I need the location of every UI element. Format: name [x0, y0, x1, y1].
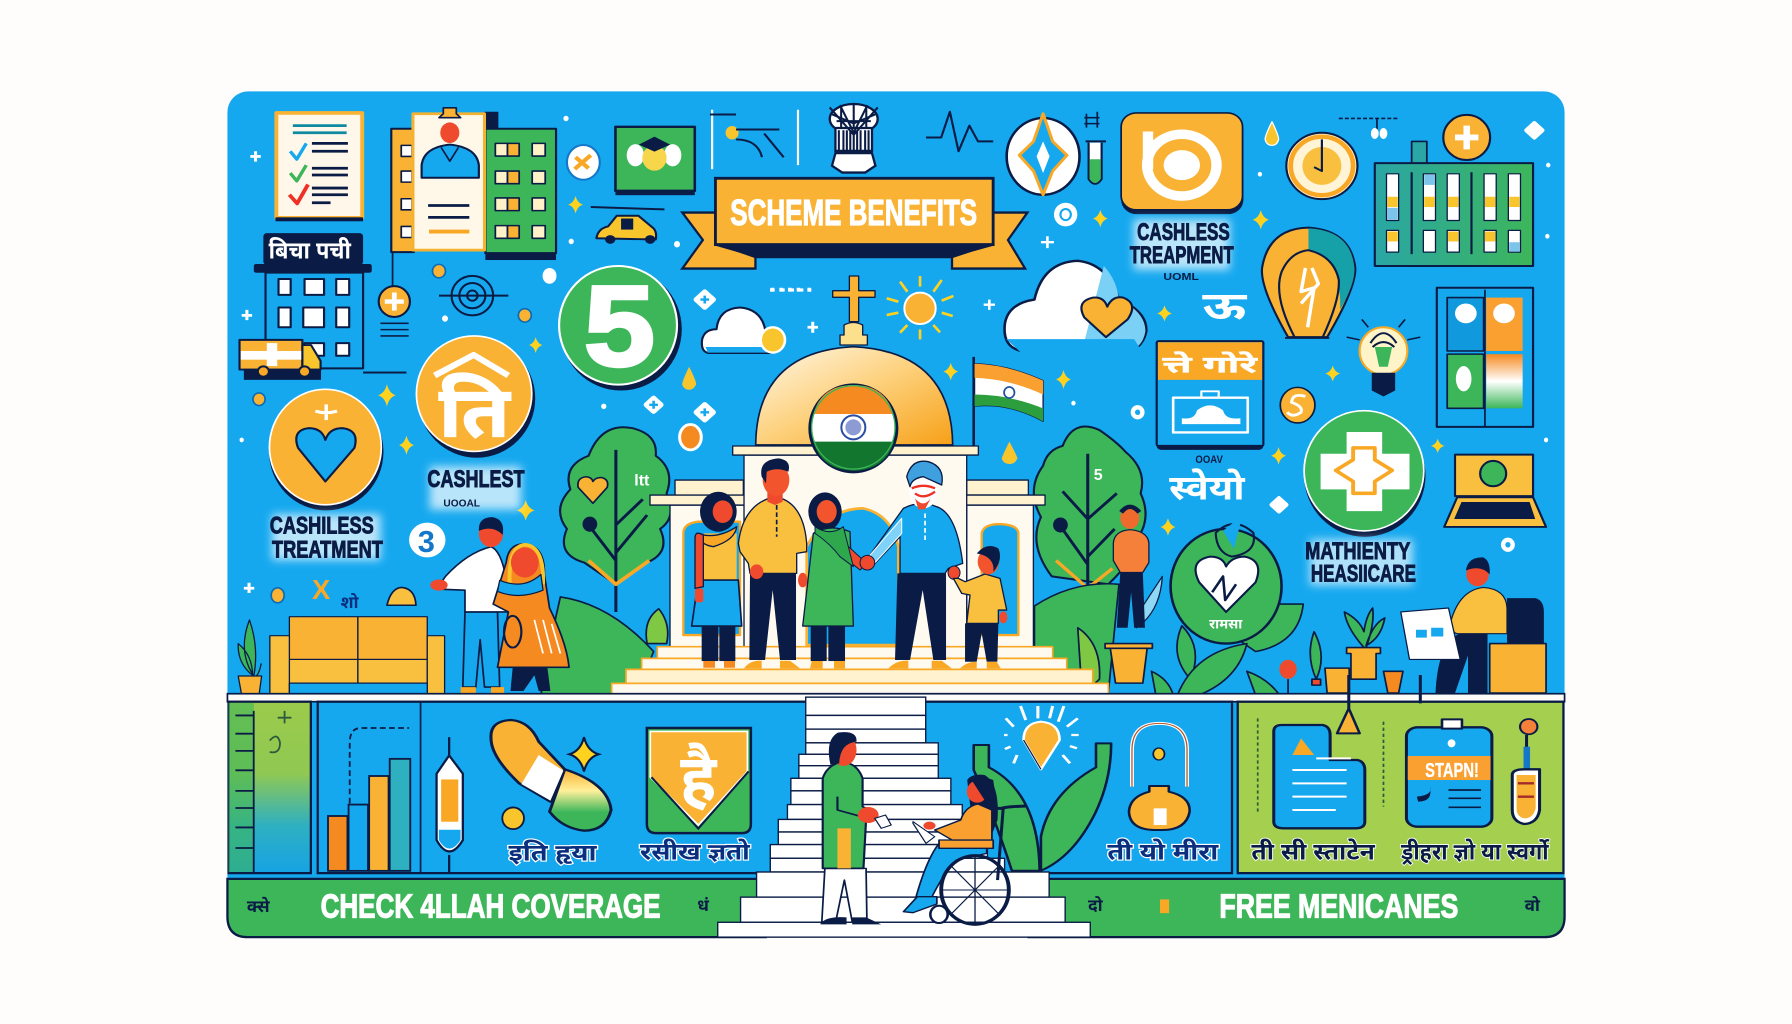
green bar: Free medicines: वो: [1525, 895, 1541, 915]
text: Hindi caption four: ती सी स्ताटेन: [1251, 838, 1376, 864]
white tokens right: [984, 120, 1550, 552]
icon: flag on pole: [974, 357, 1043, 446]
icon: balloon pin: [1262, 228, 1355, 338]
icon: coin: [502, 807, 524, 829]
icon: test tube: [1084, 112, 1106, 184]
dividers and signal squiggle: [710, 110, 798, 169]
green bar: Check coverage: CHECK 4LLAH COVERAGE: [321, 889, 661, 926]
icon: tree right: [1034, 427, 1146, 600]
figure: woman in yellow and blue: [692, 492, 742, 668]
label: Cashless treatment top: [1130, 219, 1234, 283]
temple side wings: [650, 480, 1045, 647]
icon: helicopter: [591, 207, 664, 244]
label: Cashlest: CASHLEST: [427, 466, 525, 493]
figure: man in yellow kurta: [738, 458, 807, 668]
icon: drop: [1265, 122, 1279, 145]
text: small Hindi word on badge: रामसा: [1209, 617, 1243, 632]
white swirl glyph: ऊ: [1202, 285, 1248, 328]
icon: lamp arch: [1129, 723, 1190, 830]
text: blue Hindi word left: शो: [341, 592, 360, 612]
icon: number 3 token: [409, 523, 445, 557]
icon letters on tiles: 5: [1094, 467, 1103, 484]
label: small caps OOAV: OOAV: [1195, 454, 1223, 466]
figure: woman in green dress: [803, 492, 867, 668]
temple and family scene: [612, 276, 1108, 694]
figure: person with pot: [1105, 507, 1152, 683]
label: Cashless treatment top: CASHLESS: [1137, 219, 1230, 246]
drop right of dome: [1002, 442, 1017, 464]
label: Cashless treatment left: CASHILESS: [270, 513, 374, 540]
banner: Scheme Benefits: [682, 178, 1027, 269]
icon: hospital: [1375, 115, 1533, 266]
panel: plant and lamp: [921, 702, 1232, 873]
green bar: Check coverage: क्से: [247, 896, 270, 916]
temple roof bar: [733, 446, 978, 455]
temple: [612, 276, 1108, 694]
icon: idea pin with rays: [1004, 706, 1079, 769]
green bar: Check coverage: धं: [697, 895, 710, 915]
label: Cashlest: UOOAL: [443, 498, 480, 509]
right top illustrations: [926, 112, 1550, 695]
icon: number 5 badge: [559, 266, 682, 391]
icon: building with sign: [254, 233, 406, 374]
icon: small cloud with coin: [702, 307, 785, 353]
white dots row: [770, 285, 811, 295]
central doorway: [807, 508, 898, 645]
sparkles right: [943, 210, 1444, 536]
icon: compass badge: [1007, 114, 1080, 195]
icon: bell: [1337, 675, 1420, 733]
icon letter X: X: [312, 574, 331, 605]
icon: ID card and buildings: [391, 108, 556, 260]
icon: target: [439, 276, 508, 315]
main blue panel: [227, 91, 1565, 937]
temple steps: [612, 647, 1108, 694]
label: Cashless treatment top: TREAPMENT: [1130, 242, 1234, 269]
icon: light bulb: [1347, 319, 1420, 396]
emblem: national emblem: [830, 103, 878, 173]
decorative orange dots: [253, 264, 531, 603]
dashed line and pendant: [1339, 118, 1399, 139]
text: dark sign label: बिचा पची: [269, 236, 352, 264]
panel: medicine and benefits: [318, 702, 807, 873]
icon: home badge: [416, 336, 535, 458]
icon: sign box with suitcase: [1157, 341, 1263, 450]
figure: woman in wheelchair: [903, 775, 1027, 924]
figure: man in green kurta: [821, 732, 891, 924]
dome finial and cross: [833, 276, 875, 345]
home badge glyph: ति: [439, 374, 511, 453]
label: Cashless treatment left: TREATMENT: [272, 537, 383, 564]
icon: checklist: [276, 113, 363, 221]
banner title: SCHEME BENEFITS: [730, 192, 977, 233]
icon: apple heart badge: [1171, 515, 1303, 652]
green bar: Check coverage: [227, 879, 766, 937]
icon: ID card: [1406, 719, 1492, 827]
label: Maternity healthcare: MATHIENTY: [1305, 538, 1410, 565]
temple central hall: [744, 455, 967, 647]
label: Cashless treatment left: [270, 513, 383, 564]
icon: sparkle: [569, 737, 599, 771]
figure: woman in orange sari: [493, 544, 569, 691]
ribbon tails: [682, 213, 1027, 269]
bar chart: [328, 728, 410, 871]
label: Cashlest: [427, 466, 525, 510]
figure: man in white shirt: [430, 517, 510, 694]
panel: gradient ruler: [229, 702, 311, 873]
figure: boy: [953, 546, 1007, 668]
text: Hindi caption five: ड्रीहरा ज्ञो या स्वर्गो: [1400, 838, 1550, 865]
panel: documents: [1238, 675, 1563, 873]
green bar: Free medicines: [1029, 879, 1565, 937]
icon letters on tiles: [634, 467, 1103, 490]
icon: laptop: [1444, 455, 1546, 527]
figure: person reading document: [1401, 557, 1546, 693]
dashed divider: [1258, 718, 1383, 813]
number five: 5: [584, 264, 655, 391]
Hindi sign labels on upper panel: [269, 236, 1259, 632]
icon: delivery truck: [240, 340, 321, 380]
icon: clock: [1286, 133, 1357, 199]
label: Maternity healthcare: HEASIICARE: [1311, 561, 1416, 588]
icon: logo tile: [1121, 113, 1243, 214]
icon: wrench badge: [567, 145, 600, 180]
text: Hindi caption one: इति हृया: [509, 840, 598, 866]
dome: [756, 347, 953, 445]
text: Hindi caption three: ती यो मीरा: [1107, 838, 1220, 864]
icon: folder document: [1274, 725, 1365, 828]
icon: rupee shield: [647, 728, 751, 833]
icon: heart badge: [269, 389, 383, 510]
icon: plant: [974, 743, 1111, 871]
icon: test vial: [437, 737, 463, 873]
banner box: [715, 178, 993, 245]
flag medallion: [808, 383, 898, 473]
token numeral: 3: [418, 524, 435, 559]
icon: medical plus pin: [379, 252, 410, 336]
label: Maternity healthcare: [1305, 538, 1416, 588]
icon: cloud with heart: [1005, 261, 1146, 353]
icon: capsule: [491, 720, 611, 831]
icon: heartbeat line: [926, 112, 993, 151]
icon: tree left: [560, 427, 671, 612]
text: Stapn label: STAPN!: [1425, 759, 1479, 782]
left top illustrations: [238, 108, 818, 695]
text: Hindi caption two: रसीख ज्ञतो: [640, 838, 751, 864]
bottom band backing: [227, 694, 1565, 702]
icon: potted plant left: [238, 620, 262, 695]
icon: sun: [887, 276, 953, 339]
icon: sofa: [270, 617, 445, 695]
staircase: [718, 697, 1090, 937]
sparkles: [378, 196, 583, 521]
icon: medical cross badge: [1304, 411, 1426, 537]
icon: thermometer: [1512, 719, 1540, 824]
icon: rupee shield: है: [680, 742, 718, 814]
figure: man with turban: [860, 461, 963, 668]
green bar: Free medicines: FREE MENICANES: [1219, 889, 1458, 926]
icon: bottom leaves: [1151, 608, 1385, 695]
green bar: Free medicines: दो: [1088, 895, 1104, 915]
icon: bun: [387, 587, 416, 605]
text: white Hindi word: स्वेयो: [1169, 468, 1246, 507]
label: Cashless treatment top: UOML: [1163, 272, 1199, 283]
heart stem glyph on tree: ltt: [634, 473, 650, 490]
icon: big leaves by left tree: [541, 597, 668, 695]
white tokens: [240, 116, 818, 593]
text: orange board label: त्ते गोरे: [1162, 352, 1259, 378]
icon: drops: [680, 367, 701, 450]
icon: green leaves behind person: [1034, 576, 1162, 695]
icon: plant pots: [1312, 648, 1403, 693]
icon: graduation card: [615, 127, 695, 195]
icon: red flower: [1279, 660, 1297, 693]
icon: coin: [1280, 387, 1315, 423]
icon: window panel: [1437, 288, 1533, 427]
figures left of temple: [430, 517, 569, 694]
